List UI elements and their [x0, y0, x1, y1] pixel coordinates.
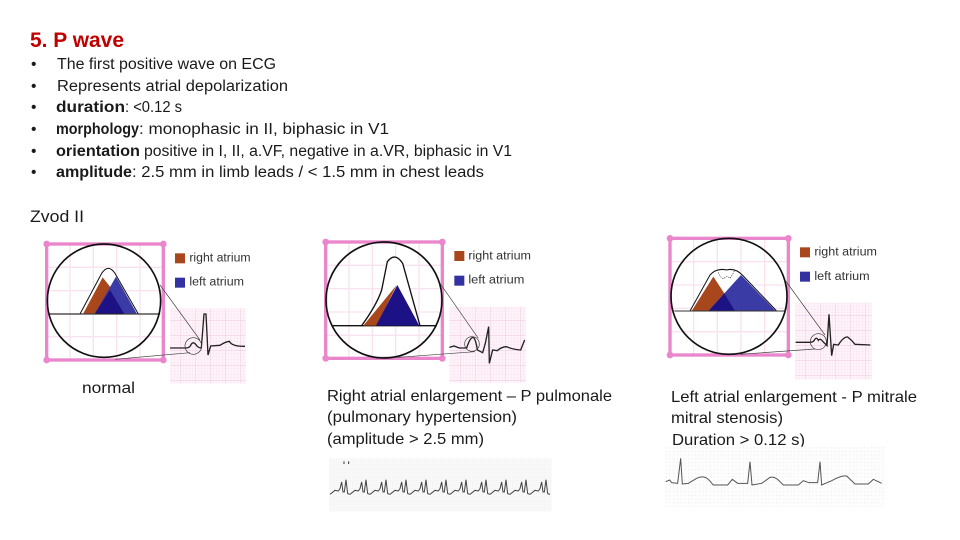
- magnified P wave: [333, 257, 437, 326]
- legend: right atrium: [189, 251, 251, 265]
- bullet: atrial depolarization: •: [31, 78, 36, 95]
- bullet: morphology: morphology: [56, 121, 139, 138]
- ECG trace on grid: [740, 280, 872, 379]
- caption: left atrial enlargement: Left atrial enlargement - P mitrale: [671, 389, 917, 406]
- ECG trace on grid: [393, 283, 526, 383]
- bullet: orientation: orientation: [56, 143, 140, 160]
- subheading: Zvod II: Zvod II: [30, 207, 84, 226]
- caption: normal: normal: [82, 380, 135, 397]
- ECG trace on grid: [115, 285, 246, 383]
- diagram: P pulmonale: [322, 239, 531, 383]
- bullet: morphology: [31, 121, 389, 138]
- magnifier circle: [326, 242, 442, 358]
- bullet list: [31, 56, 512, 181]
- magnified P wave: [49, 268, 160, 314]
- magnifier circle: [671, 238, 787, 354]
- caption: left atrial enlargement: Duration > 0.12 s): [672, 432, 805, 449]
- bullet: duration: : <0.12 s: [125, 99, 182, 116]
- ECG strip: P pulmonale: [329, 458, 552, 512]
- caption: right atrial enlargement: (pulmonary hypertension): [327, 409, 517, 426]
- diagram: normal P wave: [43, 241, 251, 383]
- title: 5. P wave: [30, 29, 124, 52]
- bullet: duration: •: [31, 99, 36, 116]
- bullet: morphology: •: [31, 121, 36, 138]
- magnified P wave: [674, 269, 784, 311]
- legend: left atrium: [814, 269, 870, 283]
- legend: right atrium: [468, 248, 531, 262]
- bullet: duration: [31, 99, 182, 116]
- bullet: orientation: •: [31, 143, 36, 160]
- bullet: first positive wave: •: [31, 56, 36, 73]
- caption: right atrial enlargement: (amplitude > 2.5 mm): [327, 431, 484, 448]
- magnifier circle: [47, 244, 161, 357]
- caption: left atrial enlargement: mitral stenosis): [671, 410, 783, 427]
- ECG strip: P mitrale: [664, 447, 886, 507]
- bullet: atrial depolarization: Represents atrial depolarization: [57, 78, 288, 95]
- legend: left atrium: [189, 275, 244, 289]
- pink grid frame: [322, 239, 446, 362]
- bullet: amplitude: : 2.5 mm in limb leads / < 1.5 mm in chest leads: [132, 164, 484, 181]
- caption: left atrial enlargement: [671, 389, 917, 449]
- pink grid frame: [667, 235, 792, 358]
- caption: right atrial enlargement: [327, 388, 612, 448]
- legend: [175, 251, 251, 289]
- legend: right atrium: [814, 245, 877, 259]
- legend: [800, 245, 877, 283]
- bullet: morphology: : monophasic in II, biphasic in V1: [139, 121, 389, 138]
- bullet: amplitude: amplitude: [56, 164, 132, 181]
- legend: left atrium: [468, 272, 524, 286]
- caption: right atrial enlargement: Right atrial enlargement – P pulmonale: [327, 388, 612, 405]
- bullet: duration: duration: [56, 99, 125, 116]
- bullet: orientation: positive in I, II, a.VF, negative in a.VR, biphasic in V1: [144, 143, 512, 160]
- bullet: first positive wave: The first positive wave on ECG: [57, 56, 276, 73]
- pink grid frame: [43, 241, 167, 363]
- legend: [454, 248, 531, 286]
- bullet: amplitude: •: [31, 164, 36, 181]
- diagram: P mitrale: [667, 235, 877, 379]
